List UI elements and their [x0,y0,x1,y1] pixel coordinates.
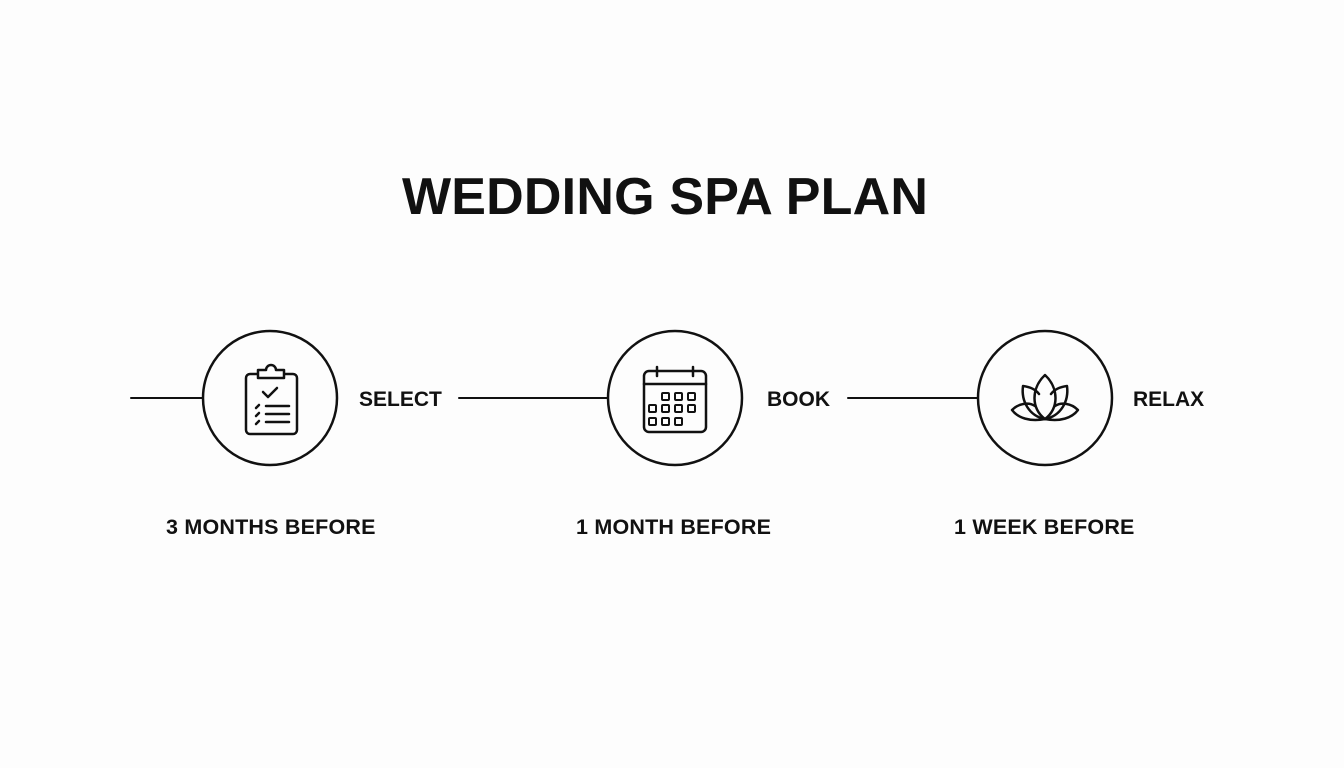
timing: 1 week: 1 WEEK BEFORE [954,515,1135,539]
label: SELECT: SELECT [359,388,442,411]
step 3 circle with lotus icon [978,331,1112,465]
timing: 1 month: 1 MONTH BEFORE [576,515,771,539]
label: RELAX: RELAX [1133,388,1204,411]
connector line 1 [131,397,203,399]
connector line 3 [848,397,977,399]
step 2 circle with calendar icon [608,331,742,465]
label: BOOK: BOOK [767,388,830,411]
connector line 2 [459,397,607,399]
timing: 3 months: 3 MONTHS BEFORE [166,515,376,539]
step 1 circle with clipboard icon [203,331,337,465]
title: WEDDING SPA PLAN [402,168,928,226]
